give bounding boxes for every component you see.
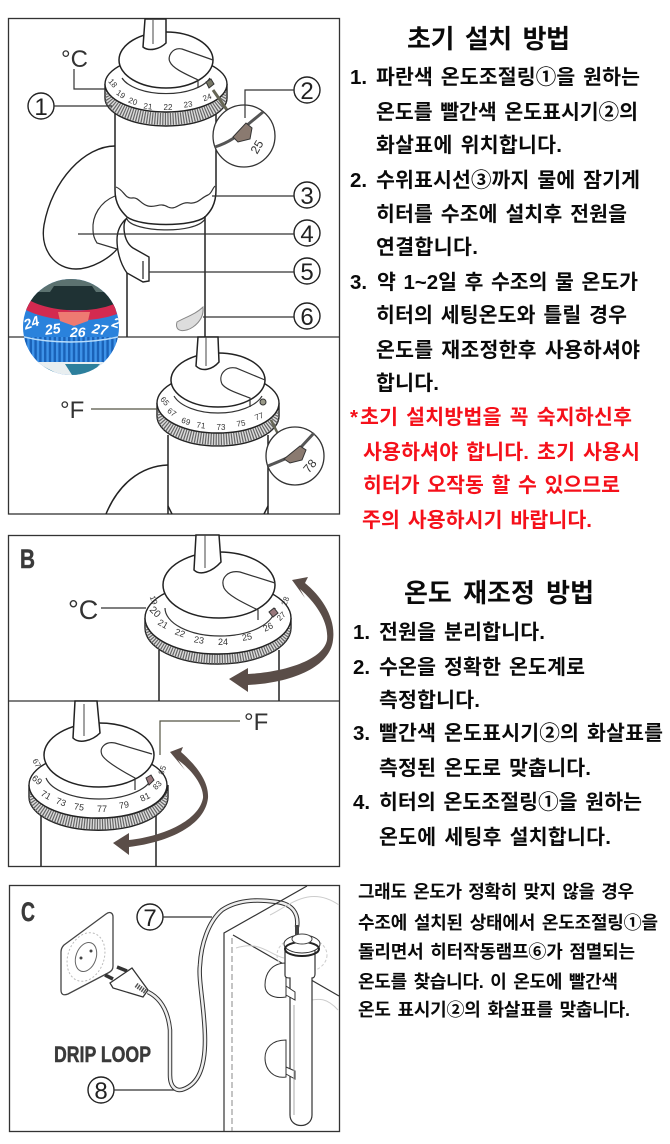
callout 3: 3: [300, 183, 314, 210]
text block: initial installation steps: 온도를 재조정한후 사용하셔야: [376, 339, 640, 362]
arrow: rotate Fahrenheit dial: [113, 747, 208, 855]
text block: if temperature still mismatched: 온도 표시기②의 화살표를 맞춥니다.: [358, 1000, 630, 1020]
callout 7: [137, 904, 212, 932]
heading: temperature recalibration: 온도 재조정 방법: [404, 578, 594, 608]
dial numbers: 24: [201, 92, 213, 103]
power cable: [148, 900, 297, 1090]
dial numbers: 67: [30, 757, 43, 770]
panel: C power connection diagram: [10, 886, 340, 1132]
wall outlet: [61, 913, 113, 995]
label: degrees Celsius: °C: [61, 46, 88, 73]
text block: recalibration steps: 측정합니다.: [379, 689, 480, 712]
text block: recalibration steps: 수온을 정확한 온도계로: [379, 656, 585, 679]
label: degrees Fahrenheit: [60, 397, 157, 424]
text block: recalibration steps: 온도에 세팅후 설치합니다.: [379, 826, 611, 849]
heading: initial installation: 초기 설치 방법: [407, 24, 570, 54]
Fahrenheit dial: [29, 701, 168, 866]
text block: recalibration steps: 히터의 온도조절링①을 원하는: [379, 791, 642, 814]
panel: A heater installation diagram: [8, 18, 340, 514]
photo inset: blue dial: [23, 279, 119, 375]
letter B: B: [20, 544, 35, 574]
dial numbers: 73: [217, 423, 226, 432]
dial numbers: 67: [165, 406, 178, 419]
photo inset: blue dial: 26: [69, 324, 86, 340]
warning text in red: 초기 설치방법을 꼭 숙지하신후: [360, 406, 632, 429]
text block: recalibration steps: 빨간색 온도표시기②의 화살표를: [379, 722, 663, 745]
dial numbers: 71: [39, 788, 53, 802]
callout 4: [78, 220, 320, 248]
dial numbers: 73: [55, 796, 67, 808]
text block: initial installation steps: 수위표시선③까지 물에 잠기게: [376, 169, 640, 192]
text block: recalibration steps: 3.: [353, 722, 370, 745]
plug: [105, 967, 148, 997]
heater in Celsius view: [43, 19, 275, 337]
text block: initial installation steps: 히터의 세팅온도와 틀릴 경우: [376, 304, 627, 327]
panel: B temperature recalibration diagrams: [8, 535, 340, 866]
dial numbers: 22: [164, 103, 173, 112]
aquarium tank: [224, 886, 339, 1131]
text block: initial installation steps: 3.: [350, 271, 367, 294]
photo inset: blue dial: 27: [90, 320, 110, 338]
callout 4: 4: [300, 221, 314, 248]
dial numbers: 19: [148, 594, 159, 606]
text block: initial installation steps: 합니다.: [376, 372, 439, 395]
text block: initial installation steps: 온도를 빨간색 온도표시기②의: [376, 101, 638, 124]
text block: if temperature still mismatched: 수조에 설치된 상태에서 온도조절링①을: [358, 913, 658, 933]
callout 6: 6: [300, 304, 314, 331]
dial numbers: 23: [183, 99, 194, 110]
warning text in red: [350, 406, 640, 532]
text block: initial installation steps: [350, 66, 640, 395]
callout 2: [245, 77, 320, 118]
warning text in red: 히터가 오작동 할 수 있으므로: [363, 474, 620, 497]
dial numbers: 69: [180, 416, 192, 427]
dial numbers: 28: [280, 595, 291, 607]
text block: if temperature still mismatched: 온도를 찾습니다. 이 온도에 빨간색: [358, 972, 618, 992]
text block: recalibration steps: 4.: [353, 791, 370, 814]
label: degrees Celsius: [68, 595, 146, 625]
text block: recalibration steps: 2.: [353, 656, 370, 679]
callout 8: [88, 1077, 174, 1105]
callout 1: [28, 93, 112, 121]
photo inset: blue dial: 2: [109, 314, 123, 332]
label: degrees Celsius: °C: [68, 595, 98, 625]
dial numbers: 77: [97, 804, 107, 814]
warning text in red: 사용하셔야 합니다. 초기 사용시: [363, 441, 640, 464]
dial numbers: 69: [30, 773, 44, 787]
magnifier circle: 25: [248, 137, 267, 156]
dial numbers: 75: [73, 801, 85, 813]
dial numbers: [158, 395, 265, 432]
text block: initial installation steps: 약 1~2일 후 수조의 물 온도가: [377, 271, 638, 294]
label: DRIP LOOP: DRIP LOOP: [54, 1042, 151, 1067]
arrow: rotate Celsius dial: [229, 577, 333, 692]
letter C: C: [21, 897, 35, 927]
dial numbers: 21: [143, 101, 154, 112]
text block: initial installation steps: 히터를 수조에 설치후 전원을: [376, 203, 627, 226]
label: degrees Fahrenheit: °F: [244, 709, 268, 736]
dial numbers: 23: [193, 634, 205, 646]
text block: initial installation steps: 1.: [350, 66, 367, 89]
callout 1: 1: [34, 94, 48, 121]
dial numbers: 25: [241, 631, 253, 643]
callout 7: 7: [143, 905, 157, 932]
dial numbers: 85: [157, 764, 168, 776]
dial numbers: 21: [156, 617, 170, 631]
warning text in red: *: [350, 406, 358, 429]
heater in Fahrenheit view: [106, 337, 324, 514]
text block: initial installation steps: 파란색 온도조절링①을 원하는: [376, 66, 640, 89]
dial numbers: 75: [236, 418, 247, 429]
callout 6: [177, 303, 320, 331]
dial numbers: 81: [138, 790, 152, 804]
dial numbers: 65: [158, 395, 171, 408]
callout 5: 5: [300, 259, 314, 286]
magnifier circle: 78: [300, 456, 320, 476]
callout 2: 2: [300, 78, 314, 105]
text block: recalibration steps: 측정된 온도로 맞춥니다.: [379, 757, 591, 780]
dial numbers: 83: [151, 779, 164, 792]
photo inset: blue dial: 24: [21, 312, 41, 333]
text block: initial installation steps: 2.: [350, 169, 367, 192]
dial numbers: 26: [261, 620, 275, 634]
dial numbers: 20: [127, 96, 139, 107]
dial numbers: 18: [106, 77, 119, 90]
label: degrees Fahrenheit: °F: [60, 397, 84, 424]
label: degrees Celsius: [61, 46, 105, 89]
dial numbers: 27: [275, 610, 288, 623]
dial numbers: [30, 757, 168, 814]
dial numbers: 71: [196, 420, 207, 431]
text block: recalibration steps: 1.: [353, 621, 370, 644]
warning text in red: 주의 사용하시기 바랍니다.: [362, 509, 592, 532]
text block: initial installation steps: 연결합니다.: [376, 236, 478, 259]
dial numbers: [106, 77, 213, 112]
callout 3: [212, 182, 320, 210]
small heater in tank: [265, 925, 320, 1126]
dial numbers: 19: [114, 88, 127, 101]
dial numbers: 20: [147, 605, 163, 620]
photo inset: blue dial: 25: [43, 320, 62, 338]
magnifier circle: [266, 427, 324, 485]
text block: initial installation steps: 화살표에 위치합니다.: [376, 134, 562, 157]
text block: recalibration steps: 전원을 분리합니다.: [379, 621, 545, 644]
text block: recalibration steps: [353, 621, 663, 849]
label: degrees Fahrenheit: [160, 709, 268, 755]
text block: if temperature still mismatched: 그래도 온도가 정확히 맞지 않을 경우: [358, 882, 634, 902]
dial numbers: 77: [253, 411, 265, 422]
callout 8: 8: [94, 1078, 108, 1105]
text block: if temperature still mismatched: [358, 882, 658, 1020]
dial numbers: 22: [174, 627, 186, 639]
magnifier circle: [213, 105, 275, 167]
text block: if temperature still mismatched: 돌리면서 히터작동램프⑥가 점멸되는: [358, 942, 635, 962]
dial numbers: 24: [218, 637, 228, 647]
dial numbers: 79: [118, 799, 130, 811]
dial numbers: [147, 594, 291, 647]
callout 5: [149, 258, 320, 286]
Celsius dial: [145, 535, 291, 701]
